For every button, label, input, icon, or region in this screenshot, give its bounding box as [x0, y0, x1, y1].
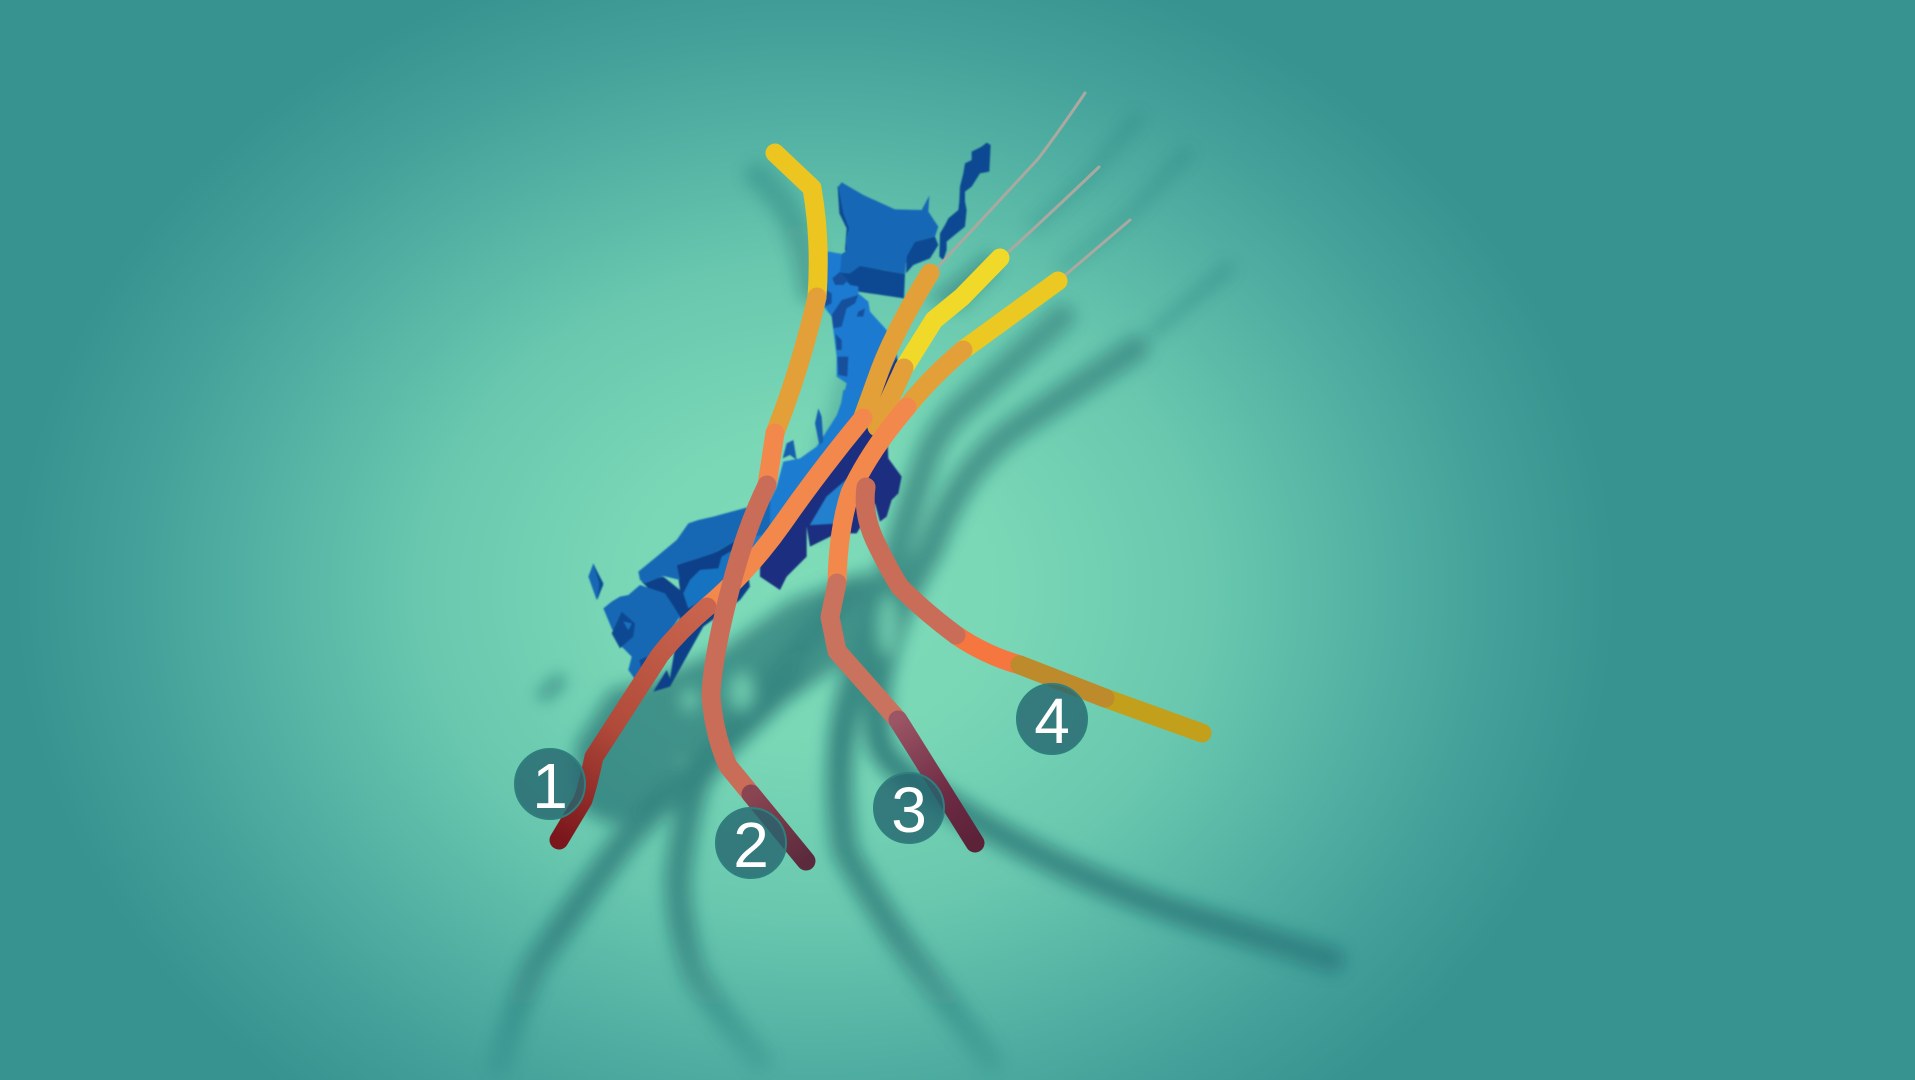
track 2: lower segments	[711, 485, 806, 861]
marker 2	[716, 808, 786, 881]
track 3: lower segments	[830, 407, 975, 843]
marker 1	[515, 749, 585, 822]
marker 3	[874, 773, 944, 846]
marker 4: 4	[1034, 685, 1070, 757]
track 4: upper segments	[877, 258, 1000, 427]
track 1	[559, 273, 930, 840]
light gaps in the island shadow	[681, 593, 900, 712]
marker 3: 3	[891, 774, 927, 846]
track 3: upper segments	[907, 281, 1058, 407]
western Honshu, Shikoku and Kyushu	[588, 500, 770, 692]
marker 4	[1017, 684, 1087, 757]
central Honshu	[747, 390, 902, 590]
marker 1: 1	[532, 750, 568, 822]
map of Japan	[588, 143, 991, 692]
shadows of tracks and islands	[500, 115, 1332, 1065]
thin grey tails of the tracks	[937, 93, 1130, 278]
track 2: upper segments	[767, 153, 818, 485]
track 4: lower segments	[865, 487, 1202, 733]
marker 2: 2	[733, 809, 769, 881]
Hokkaido and northern Honshu	[824, 143, 991, 430]
